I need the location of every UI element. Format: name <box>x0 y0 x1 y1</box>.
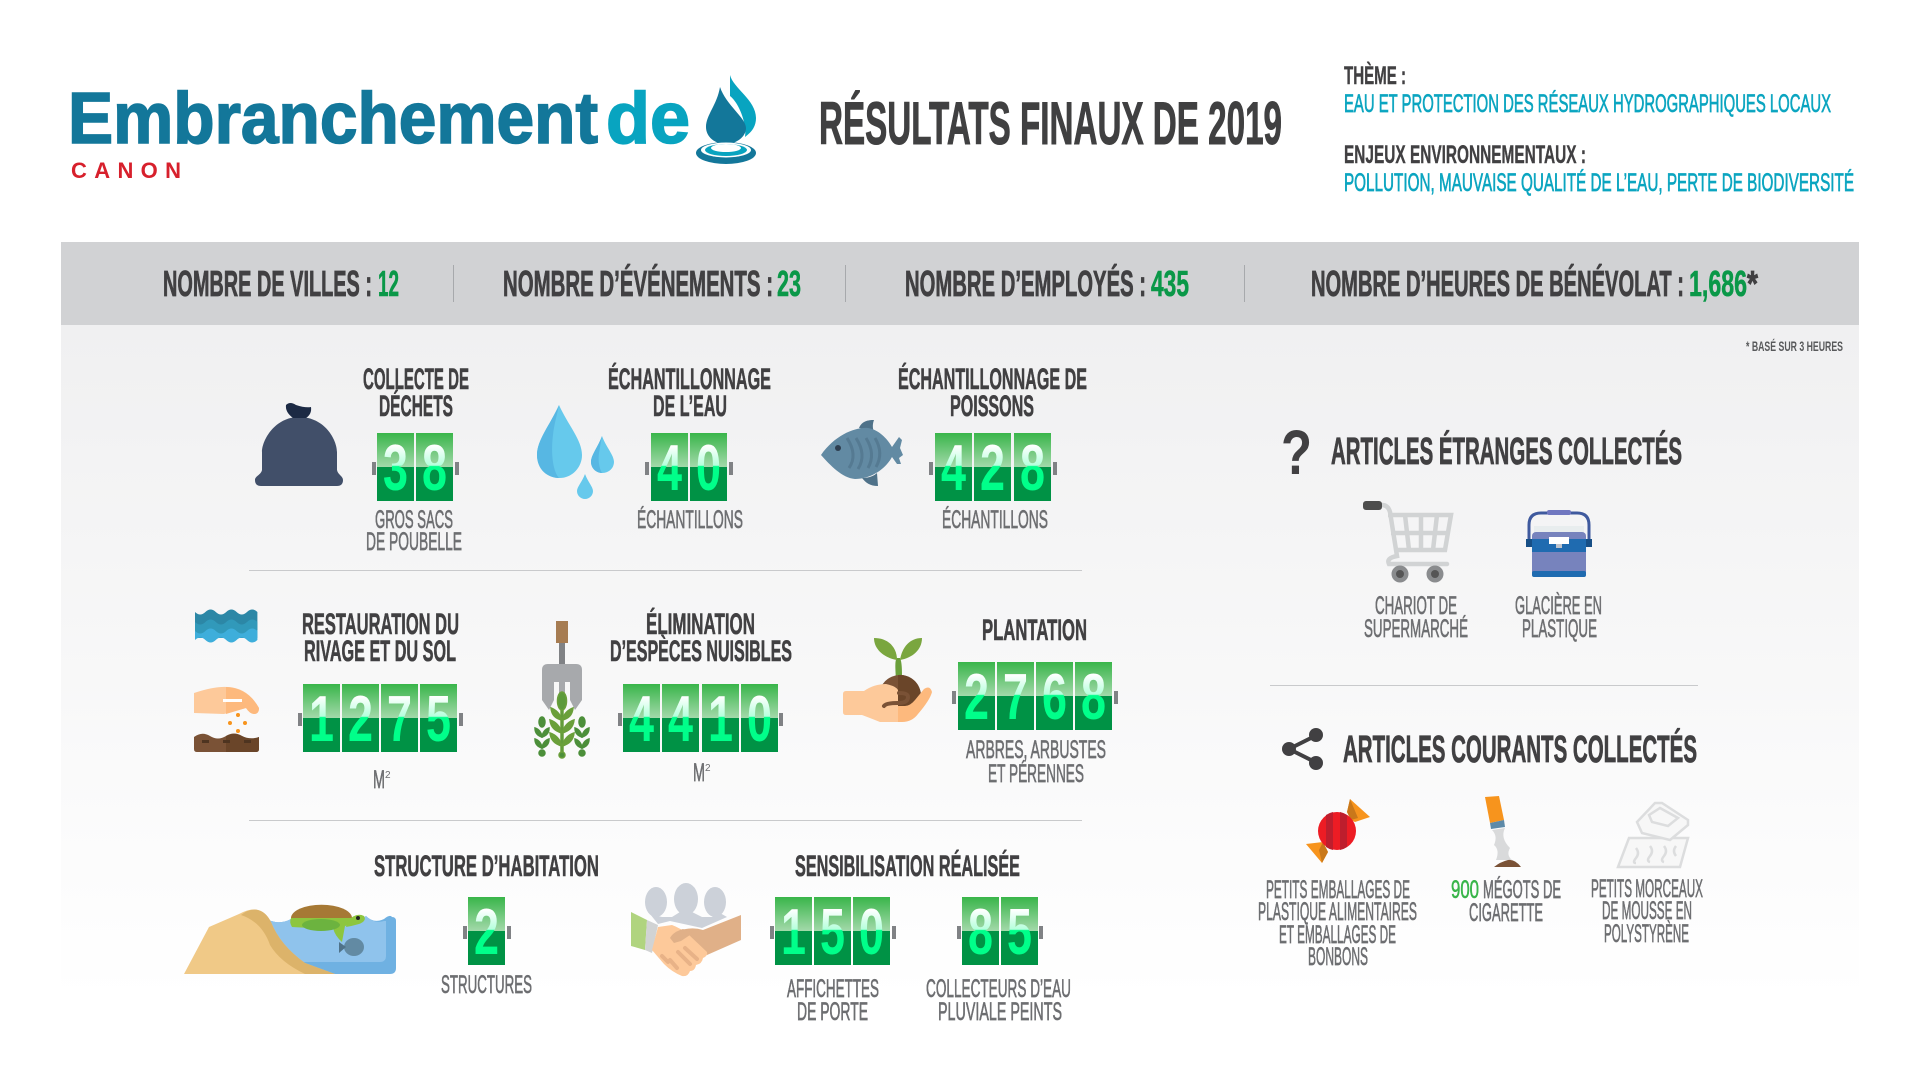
cigarette label <box>1451 875 1561 927</box>
invasive species heading: ÉLIMINATION <box>646 607 755 641</box>
theme block <box>1344 61 1854 197</box>
storm drains label: COLLECTEURS D’EAU <box>926 975 1071 1003</box>
counter: 2768: 2 <box>964 660 989 733</box>
cooler label <box>1515 591 1602 643</box>
cigarette label: MÉGOTS DE <box>1483 875 1561 904</box>
water sampling heading: DE L’EAU <box>653 390 727 423</box>
counter: 4410 <box>618 682 783 755</box>
fish sampling heading: POISSONS <box>950 390 1034 423</box>
counter: 85 <box>957 895 1043 968</box>
waste collection heading <box>363 363 469 423</box>
waste collection label <box>366 506 462 556</box>
icon: garden fork and plants <box>535 621 589 758</box>
planting label: ET PÉRENNES <box>988 759 1084 788</box>
fish sampling heading <box>898 362 1087 423</box>
candy label: ET EMBALLAGES DE <box>1279 921 1396 949</box>
cart label: SUPERMARCHÉ <box>1364 614 1468 643</box>
habitat structure heading: STRUCTURE D’HABITATION <box>374 850 599 883</box>
counter: 1275: 2 <box>348 682 373 755</box>
stat: employees <box>905 263 1189 304</box>
stat: cities: 12 <box>378 263 399 304</box>
panel: common items: PLASTIQUE ALIMENTAIRES <box>1258 898 1417 926</box>
cart label <box>1364 592 1468 643</box>
water sampling label: ÉCHANTILLONS <box>637 505 743 534</box>
icon: polystyrene foam <box>1618 803 1688 867</box>
counter: 1275 <box>298 682 463 755</box>
waste collection heading: DÉCHETS <box>379 389 453 423</box>
logo word de: de <box>606 79 690 159</box>
shoreline restoration heading <box>302 608 459 668</box>
planting label: ARBRES, ARBUSTES <box>966 736 1106 764</box>
counter: 428: 4 <box>941 431 966 504</box>
stat: events: NOMBRE D’ÉVÉNEMENTS : <box>503 263 773 304</box>
logo <box>68 75 756 183</box>
waste collection label: DE POUBELLE <box>366 528 462 556</box>
cooler label: PLASTIQUE <box>1522 615 1597 643</box>
counter: 38: 3 <box>383 431 408 504</box>
door hangers label: AFFICHETTES <box>787 975 879 1003</box>
counter: 428: 8 <box>1020 431 1045 504</box>
counter: 4410: 4 <box>668 682 693 755</box>
counter: 2768: 8 <box>1081 660 1106 733</box>
icon: question mark: ? <box>1281 418 1312 488</box>
icon: water drops <box>537 405 614 499</box>
panel: summary band <box>61 242 1859 325</box>
stat: volunteer hours: 1,686 <box>1689 263 1747 304</box>
unit: square metres: M <box>373 766 385 794</box>
footnote: * BASÉ SUR 3 HEURES <box>1746 338 1843 354</box>
counter: 1275: 5 <box>426 682 451 755</box>
waste collection label: GROS SACS <box>375 506 453 534</box>
icon: habitat with sand, water, turtle and fish <box>184 905 396 974</box>
icon: plastic cooler <box>1526 510 1592 577</box>
counter: 2768 <box>952 660 1118 733</box>
stat: events: 23 <box>777 263 801 304</box>
counter: 40 <box>645 431 733 504</box>
counter: 150: 1 <box>781 895 806 968</box>
foam label: DE MOUSSE EN <box>1602 897 1692 925</box>
icon: hand sowing seeds in soil <box>194 687 259 752</box>
counter: 1275: 1 <box>309 682 334 755</box>
logo Canon: CANON <box>71 158 181 183</box>
stat: employees: NOMBRE D’EMPLOYÉS : <box>905 263 1146 304</box>
panel: common items <box>1258 727 1703 971</box>
shoreline restoration heading: RIVAGE ET DU SOL <box>304 635 456 668</box>
fish sampling label: ÉCHANTILLONS <box>942 505 1048 534</box>
stat: volunteer hours: * <box>1747 263 1758 304</box>
icon: handshake with people <box>631 883 741 976</box>
counter: 150: 0 <box>859 895 884 968</box>
text: PETITS MORCEAUX <box>1591 875 1703 903</box>
icon: waves <box>195 610 257 642</box>
logo wordmark: Embranchement <box>68 79 598 159</box>
unit: square metres: 2 <box>705 763 711 774</box>
cooler label: GLACIÈRE EN <box>1515 591 1602 620</box>
storm drains label: PLUVIALE PEINTS <box>938 998 1062 1026</box>
icon: fish <box>821 420 903 486</box>
icon: hand holding seedling <box>843 638 932 722</box>
foam label: POLYSTYRÈNE <box>1604 919 1689 948</box>
counter: 428 <box>929 431 1057 504</box>
counter: 40: 0 <box>696 431 721 504</box>
waste collection heading: COLLECTE DE <box>363 363 469 396</box>
water sampling heading: ÉCHANTILLONNAGE <box>608 362 771 396</box>
counter: 4410: 0 <box>747 682 772 755</box>
invasive species heading <box>610 607 792 668</box>
panel: strange items <box>1281 418 1682 643</box>
door hangers label: DE PORTE <box>797 998 868 1026</box>
icon: water drop logo <box>696 75 756 164</box>
counter: 85: 5 <box>1007 895 1032 968</box>
fish sampling heading: ÉCHANTILLONNAGE DE <box>898 362 1087 396</box>
counter: 4410: 4 <box>629 682 654 755</box>
counter: 150 <box>770 895 896 968</box>
icon: weeds <box>535 692 589 758</box>
counter: 428: 2 <box>980 431 1005 504</box>
shoreline restoration heading: RESTAURATION DU <box>302 608 459 641</box>
planting heading: PLANTATION <box>982 614 1087 647</box>
counter: 2768: 6 <box>1042 660 1067 733</box>
stat: events <box>503 263 801 304</box>
unit: square metres: 2 <box>385 770 391 781</box>
stat: cities: NOMBRE DE VILLES : <box>163 263 372 304</box>
planting label <box>966 736 1106 788</box>
icon: share nodes <box>1282 728 1323 770</box>
unit: square metres: M <box>693 759 705 787</box>
stat: employees: 435 <box>1151 263 1189 304</box>
counter: 38 <box>372 431 459 504</box>
theme label: THÈME : <box>1344 61 1406 90</box>
counter: 1275: 7 <box>387 682 412 755</box>
icon: cigarette butt <box>1485 796 1521 867</box>
cigarette label: CIGARETTE <box>1469 899 1543 927</box>
counter: 150: 5 <box>820 895 845 968</box>
panel: main background <box>61 325 1859 1075</box>
issues label: ENJEUX ENVIRONNEMENTAUX : <box>1344 141 1586 169</box>
icon: candy <box>1306 799 1370 863</box>
door hangers label <box>787 975 879 1026</box>
candy label: BONBONS <box>1308 943 1368 971</box>
cart label: CHARIOT DE <box>1375 592 1457 620</box>
foam label <box>1591 875 1703 948</box>
counter: 85: 8 <box>968 895 993 968</box>
habitat structure label: STRUCTURES <box>441 971 532 999</box>
storm drains label <box>926 975 1071 1026</box>
icon: garbage bag <box>255 403 343 486</box>
invasive species heading: D’ESPÈCES NUISIBLES <box>610 634 792 668</box>
outreach heading: SENSIBILISATION RÉALISÉE <box>795 849 1020 883</box>
counter: 38: 8 <box>422 431 447 504</box>
icon: shopping cart <box>1363 501 1451 582</box>
candy label <box>1258 876 1417 971</box>
cigarette label: 900 <box>1451 876 1479 904</box>
water sampling heading <box>608 362 771 423</box>
panel: common items: PETITS EMBALLAGES DE <box>1266 876 1410 904</box>
counter: 2: 2 <box>474 895 499 968</box>
counter: 4410: 1 <box>708 682 733 755</box>
counter: 40: 4 <box>657 431 682 504</box>
counter: 2768: 7 <box>1003 660 1028 733</box>
stat: cities <box>163 263 399 304</box>
title: RÉSULTATS FINAUX DE 2019 <box>819 90 1282 157</box>
